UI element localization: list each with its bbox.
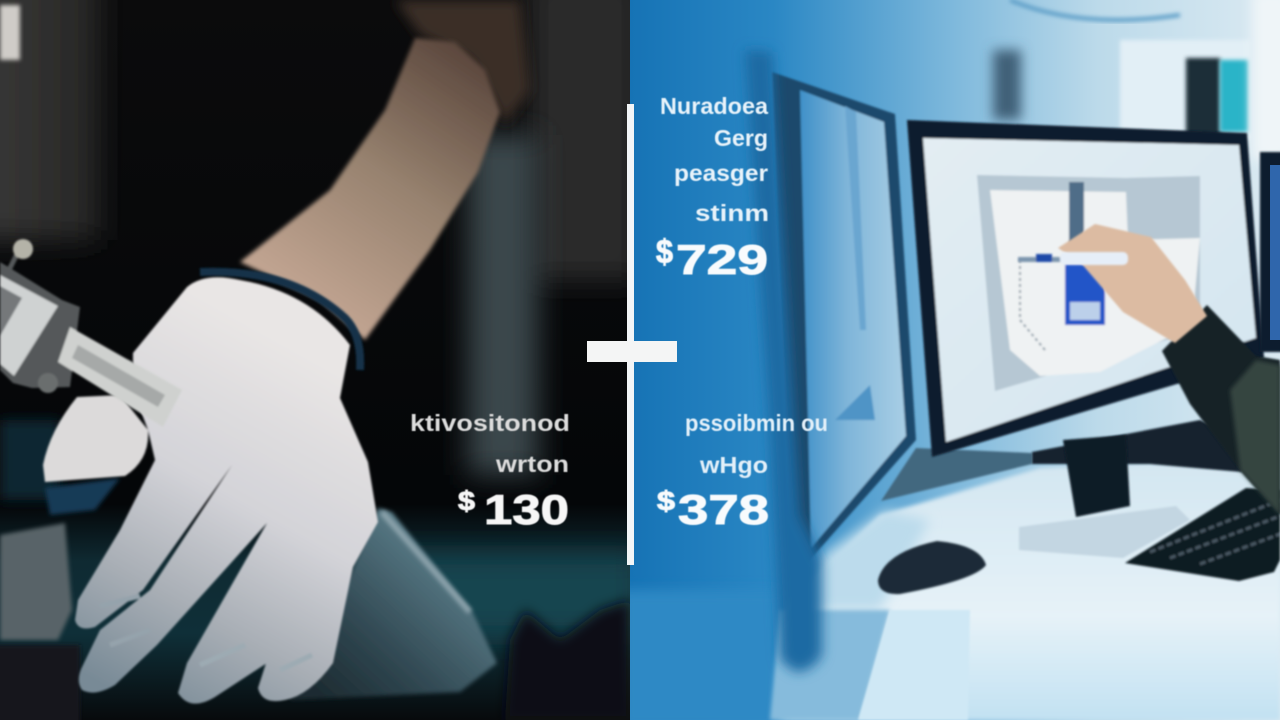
horizontal plus bar bbox=[587, 341, 677, 362]
vertical divider bbox=[627, 104, 634, 565]
stat: top right price: 729 bbox=[676, 236, 768, 283]
desk bright panel bbox=[858, 610, 970, 720]
machine collar bbox=[45, 478, 120, 515]
text block: top right caption: Nuradoea bbox=[660, 93, 768, 119]
sleeve camo bbox=[1230, 360, 1280, 515]
text block: lower left caption: ktivositonod bbox=[410, 410, 570, 436]
text block: lower right caption: pssoibmin ou bbox=[685, 410, 828, 436]
glove hand bbox=[43, 277, 378, 704]
stat: lower left price bbox=[458, 486, 569, 533]
text block: lower left caption bbox=[410, 410, 570, 477]
pointing hand bbox=[1058, 224, 1207, 343]
text block: lower left caption: wrton bbox=[495, 451, 569, 477]
stat: top right price bbox=[656, 233, 768, 283]
machine base bbox=[0, 645, 80, 720]
desk bbox=[770, 460, 1280, 720]
stat: lower left price: $ bbox=[458, 486, 475, 516]
desk left blue bbox=[620, 590, 780, 720]
text block: top right caption bbox=[660, 93, 769, 226]
keyboard bbox=[1125, 488, 1280, 581]
desk mid tone bbox=[770, 610, 890, 720]
monitor rear shadow bbox=[1032, 420, 1242, 472]
stat: top right price: $ bbox=[656, 233, 673, 270]
text block: lower right caption bbox=[685, 410, 828, 478]
side monitor bbox=[772, 72, 1032, 563]
forearm bbox=[240, 38, 500, 340]
main monitor bbox=[907, 120, 1264, 457]
pen bbox=[1018, 252, 1128, 265]
stat: lower left price: 130 bbox=[484, 486, 569, 533]
hair bbox=[395, 0, 530, 125]
tablet edge highlight bbox=[382, 512, 470, 612]
text block: top right caption: Gerg bbox=[714, 125, 768, 151]
stat: lower right price: $ bbox=[657, 486, 675, 516]
icon: caliper bbox=[0, 239, 182, 427]
tablet under hand bbox=[290, 508, 497, 700]
text block: lower right caption: wHgo bbox=[699, 452, 768, 478]
sleeve bbox=[1162, 305, 1280, 515]
icon: mouse bbox=[878, 541, 986, 594]
right-edge monitor screen bbox=[1270, 165, 1280, 340]
stat: lower right price bbox=[657, 486, 769, 533]
glove cuff band bbox=[200, 272, 360, 370]
right-edge monitor bbox=[1260, 152, 1280, 352]
monitor stand bbox=[1063, 435, 1130, 517]
machine cylinder bbox=[0, 523, 72, 640]
panel: workshop photo, left half bbox=[0, 0, 640, 720]
stat: lower right price: 378 bbox=[678, 486, 769, 533]
bottom debris bbox=[505, 600, 630, 720]
text block: top right caption: stinm bbox=[695, 200, 769, 226]
desk shaded left bbox=[800, 510, 930, 610]
text block: top right caption: peasger bbox=[674, 160, 768, 186]
panel: computer lab photo, right half bbox=[620, 0, 1280, 720]
side monitor column bbox=[745, 50, 822, 672]
monitor stand base bbox=[1019, 506, 1190, 558]
